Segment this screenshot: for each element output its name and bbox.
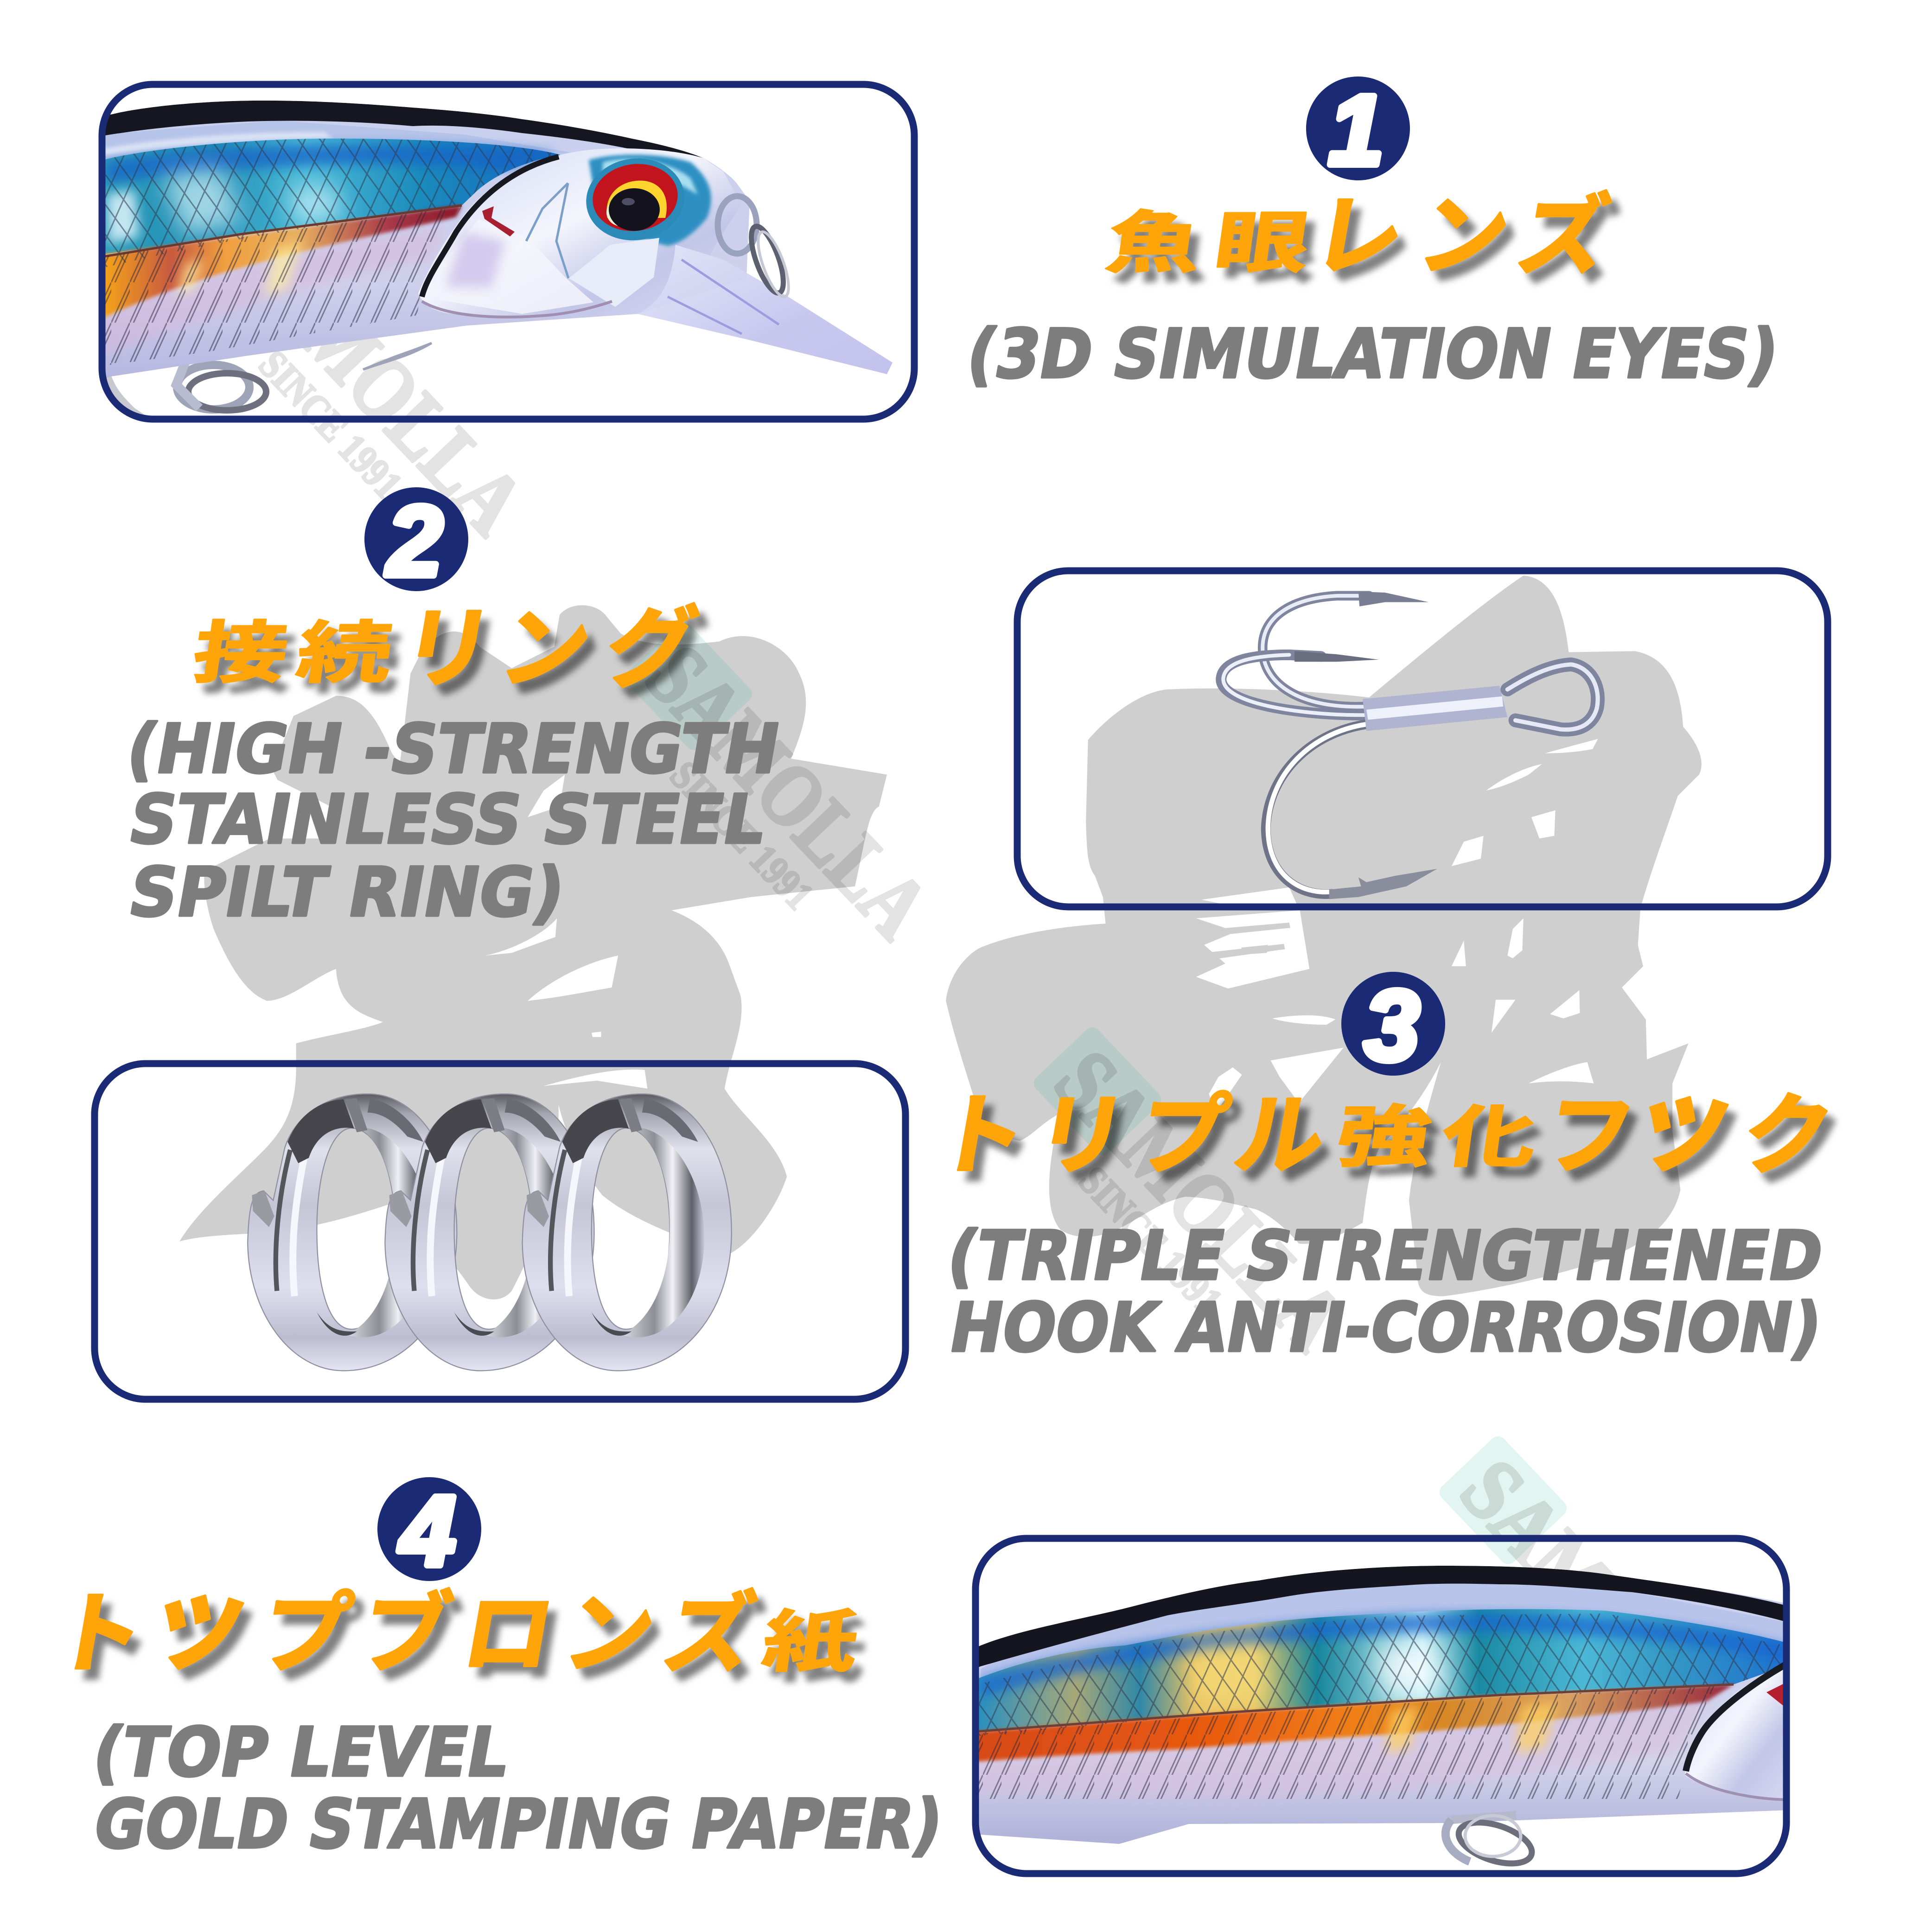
panel border	[976, 1538, 1786, 1874]
title: triple hook: 強化	[1332, 1100, 1542, 1175]
watermark 1: SAMOLLA since 1991: SINCE 1991	[250, 342, 410, 508]
title: triple hook: ッ	[1620, 1065, 1748, 1184]
title: top bronze paper: プブロンズ	[253, 1585, 762, 1683]
subtitle: top level gold stamping paper: (TOP LEVEL	[87, 1713, 516, 1792]
background calligraphy: right character	[946, 575, 1702, 1296]
title: triple hook: トリプル	[929, 1086, 1333, 1185]
badge 2	[364, 485, 468, 597]
subtitle: stainless steel split ring	[121, 709, 786, 932]
title: fish eye lens	[1102, 187, 1616, 286]
title: fish eye lens: 魚眼	[1102, 206, 1314, 281]
subtitle: 3D simulation eyes: (3D SIMULATION EYES)	[961, 314, 1785, 394]
background calligraphy: left character	[179, 605, 887, 1300]
subtitle: top level gold stamping paper: GOLD STAMPING PAPER)	[88, 1785, 949, 1864]
title: triple hook: ク	[1734, 1086, 1840, 1185]
title: split ring	[188, 599, 703, 698]
title: top bronze paper	[46, 1563, 862, 1683]
title: top bronze paper: 紙	[758, 1605, 862, 1680]
title: triple hook: フ	[1537, 1086, 1642, 1185]
icon: 3D eye	[586, 159, 684, 240]
title: top bronze paper: ト	[46, 1585, 152, 1683]
icon: belly hook ring	[99, 343, 432, 417]
subtitle: top level gold stamping paper	[87, 1713, 949, 1864]
badge 1	[1306, 74, 1410, 186]
panel border	[102, 84, 914, 419]
subtitle: stainless steel split ring: STAINLESS STEEL	[123, 780, 772, 859]
watermark 3: SAMOLLA since 1991: SINCE 1991	[1070, 1158, 1231, 1324]
badge 3	[1341, 969, 1445, 1081]
subtitle: triple strengthened hook: HOOK ANTI-CORROSION)	[944, 1288, 1828, 1367]
icon: split rings	[248, 1094, 732, 1371]
title: top bronze paper: ッ	[136, 1563, 264, 1682]
panel: split rings	[95, 1064, 905, 1399]
subtitle: triple strengthened hook: (TRIPLE STRENGTHENED	[942, 1216, 1829, 1295]
panel border	[1017, 571, 1828, 907]
watermark 3: SAMOLLA since 1991: SAMOLLA	[1037, 1032, 1363, 1368]
title: triple hook	[929, 1065, 1844, 1185]
watermark 2: SAMOLLA since 1991	[590, 615, 948, 982]
subtitle: triple strengthened hook	[942, 1216, 1829, 1367]
watermark 2: SAMOLLA since 1991: SAMOLLA	[628, 627, 948, 956]
watermark 2: SAMOLLA since 1991: SINCE 1991	[661, 753, 822, 918]
title: fish eye lens: レンズ	[1306, 187, 1616, 286]
icon: nose ring	[718, 196, 795, 300]
title: split ring: リング	[395, 599, 703, 698]
panel: lure head with 3D eye	[99, 84, 914, 419]
badge 1: 1	[1328, 74, 1384, 186]
watermark 1: SAMOLLA since 1991: SAMOLLA	[217, 216, 542, 552]
badge 4: 4	[398, 1475, 456, 1587]
lure body	[106, 100, 749, 378]
panel: lure side view	[974, 1538, 1790, 1874]
icon: belly hook ring	[1446, 1815, 1537, 1871]
subtitle: stainless steel split ring: (HIGH -STRENGTH	[121, 709, 786, 789]
lure lip	[638, 245, 893, 374]
badge 3: 3	[1364, 969, 1420, 1081]
panel border	[95, 1064, 905, 1399]
badge 4	[377, 1475, 481, 1587]
subtitle: stainless steel split ring: SPILT RING)	[123, 853, 571, 932]
watermark 4: SAMOLLA partly hidden: SAM	[1442, 1441, 1631, 1632]
icon: treble hook	[1221, 592, 1598, 899]
badge 2: 2	[385, 485, 443, 597]
title: split ring: 接続	[188, 616, 397, 691]
panel: treble hook	[1017, 571, 1828, 907]
lure body	[974, 1562, 1790, 1850]
